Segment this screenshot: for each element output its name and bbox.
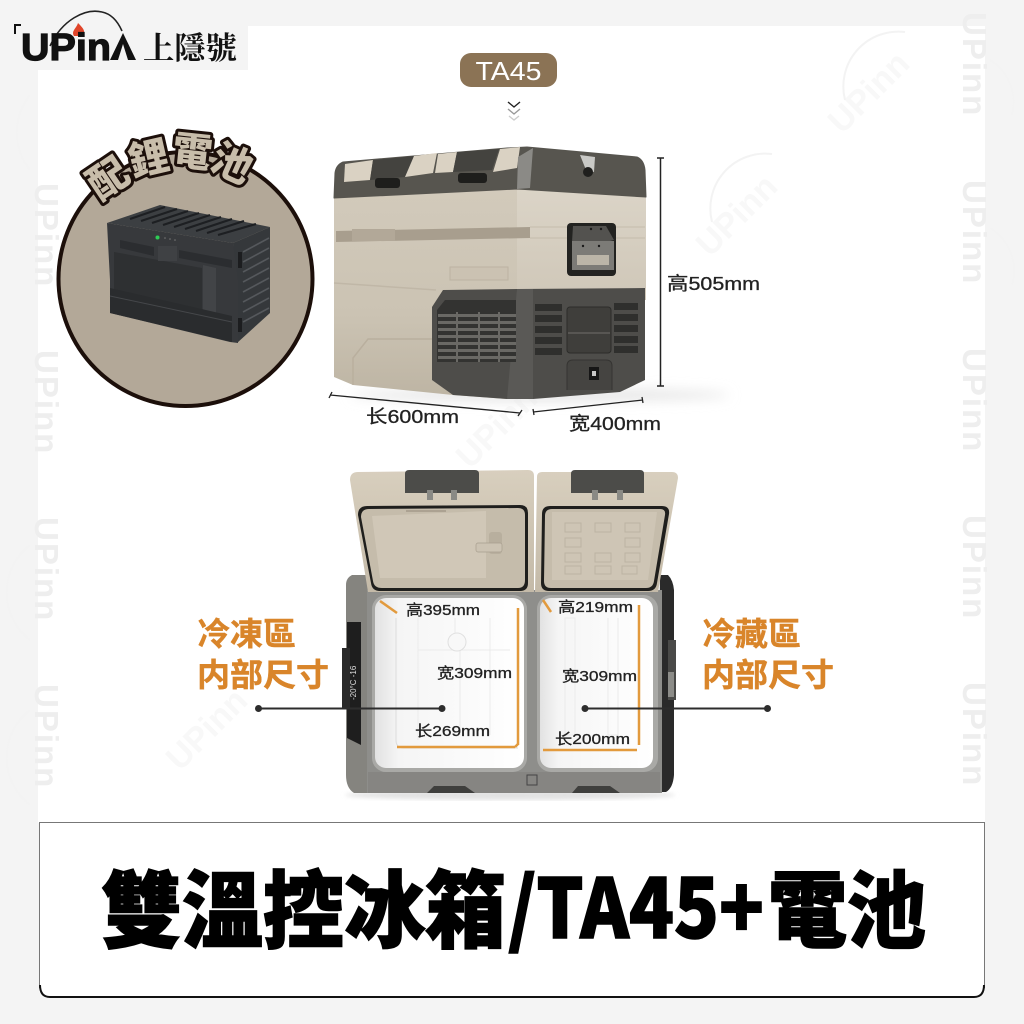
lower recess shape — [353, 339, 432, 385]
model pill: TA45: TA45 — [476, 56, 542, 86]
shadow — [345, 790, 675, 800]
open cooler product — [342, 470, 678, 800]
label: freezer inner dimensions — [197, 616, 329, 693]
right side panel — [658, 575, 676, 792]
label: freezer inner dimensions: 内部尺寸 — [197, 657, 329, 693]
freezer dimensions text — [406, 602, 512, 740]
front grille — [437, 300, 516, 362]
dark base — [432, 288, 645, 399]
front body — [334, 189, 517, 399]
logo: UPinn 上隱號 — [0, 0, 248, 70]
watermark pattern: UPinn — [956, 682, 993, 787]
watermark pattern: UPinn — [449, 379, 545, 476]
battery callout — [58, 118, 312, 406]
ground shadow — [350, 389, 730, 401]
fridge dimensions text: 长200mm — [555, 731, 630, 748]
label: fridge inner dimensions: 内部尺寸 — [702, 657, 834, 693]
watermark pattern: UPinn — [956, 12, 993, 117]
dimension: height 505mm — [657, 158, 760, 386]
side vents — [535, 303, 638, 355]
service panel — [567, 307, 611, 353]
label: fridge inner dimensions: 冷藏區 — [702, 616, 801, 652]
dimension: length 600mm — [329, 392, 522, 427]
body groove — [336, 227, 530, 242]
right lid — [535, 470, 678, 592]
lid segments — [344, 147, 595, 189]
label: fridge inner dimensions — [702, 616, 834, 693]
dimension: length 600mm: 长600mm — [366, 406, 459, 427]
badge text: 配鋰電池: 池 — [203, 126, 263, 195]
leader: freezer — [255, 705, 446, 712]
power socket — [567, 360, 612, 390]
title text: 雙溫控冰箱 — [101, 845, 506, 966]
side body — [517, 189, 646, 300]
freezer dimensions text: 高395mm — [406, 602, 480, 619]
watermark pattern: UPinn — [689, 167, 785, 264]
watermark pattern: UPinn — [956, 348, 993, 453]
watermark pattern: UPinn — [956, 515, 993, 620]
leader: fridge — [582, 705, 771, 712]
title box — [39, 822, 985, 998]
left side control panel: -20°C -16 — [349, 665, 358, 700]
icon: down chevrons — [508, 102, 520, 120]
logo: UPinn 上隱號: 上隱號 — [143, 31, 237, 66]
watermark pattern — [7, 12, 1014, 805]
cabinet rim — [367, 590, 662, 793]
fridge dimensions text — [555, 599, 637, 748]
fridge orange measure lines — [543, 600, 639, 750]
left lid — [350, 470, 534, 592]
watermark pattern: UPinn — [28, 350, 65, 455]
fridge dimensions text: 高219mm — [558, 599, 633, 616]
watermark pattern: UPinn — [159, 681, 255, 778]
watermark pattern: UPinn — [28, 183, 65, 288]
title text — [101, 843, 926, 966]
badge text: 配鋰電池: 鋰 — [122, 123, 174, 188]
fridge cavity — [537, 595, 658, 772]
left side control panel — [342, 575, 368, 793]
white content panel — [38, 26, 985, 823]
title text: 電池 — [768, 845, 926, 966]
dimension: width 400mm — [533, 397, 661, 434]
model pill: TA45 — [460, 53, 557, 87]
title text: /TA45+ — [508, 843, 764, 962]
icon: battery — [107, 205, 270, 343]
watermark pattern: UPinn — [821, 44, 917, 141]
dimension: width 400mm: 宽400mm — [569, 413, 661, 434]
lid top band — [334, 147, 646, 198]
label recess — [450, 267, 508, 280]
freezer cavity — [372, 595, 527, 772]
fridge dimensions text: 宽309mm — [562, 668, 637, 685]
watermark pattern: UPinn — [28, 684, 65, 789]
label: freezer inner dimensions: 冷凍區 — [197, 616, 296, 652]
freezer orange measure lines — [380, 601, 518, 747]
upright cooler product — [334, 147, 730, 401]
dimension: height 505mm: 高505mm — [667, 273, 760, 294]
badge text: 配鋰電池 — [74, 118, 263, 211]
watermark pattern: UPinn — [28, 517, 65, 622]
watermark pattern: UPinn — [956, 180, 993, 285]
logo: UPinn 上隱號: UPin — [21, 27, 111, 69]
side handle — [567, 223, 616, 276]
freezer dimensions text: 长269mm — [415, 723, 490, 740]
freezer dimensions text: 宽309mm — [437, 665, 512, 682]
badge text: 配鋰電池: 電 — [170, 118, 216, 180]
badge text: 配鋰電池: 配 — [74, 141, 139, 211]
battery circle background — [58, 152, 312, 406]
